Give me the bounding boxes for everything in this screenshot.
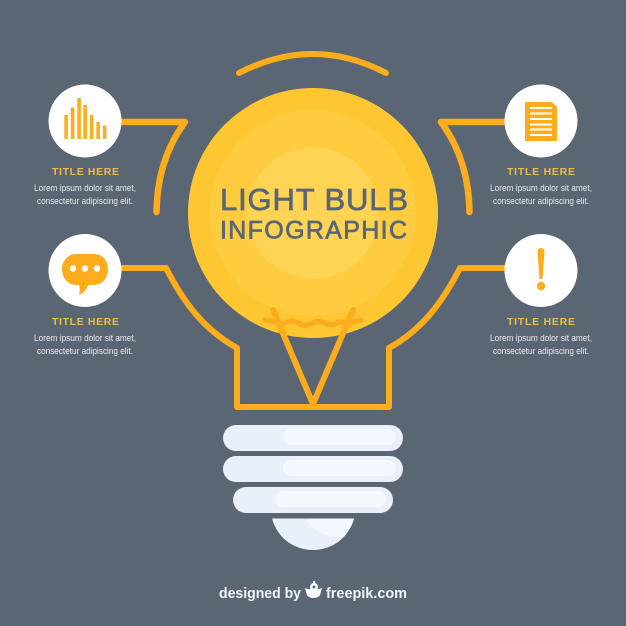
footer credit: designed by [219, 585, 302, 602]
title: TITLE HERE [507, 316, 575, 328]
filament coil [265, 320, 361, 325]
icon: freepik mascot [305, 581, 322, 598]
panel: top left [34, 84, 136, 206]
footer credit: freepik.com [326, 585, 407, 602]
panel: bottom left [34, 234, 136, 356]
bulb glass [188, 88, 438, 338]
body text: Lorem ipsum dolor sit amet, [490, 333, 592, 343]
body text [490, 333, 592, 356]
connector: top right [441, 122, 508, 212]
body text [490, 183, 592, 206]
base ring 3 [233, 487, 393, 513]
body text: consectetur adipiscing elit. [37, 196, 133, 206]
icon: bar chart [48, 84, 122, 158]
footer credit [219, 581, 407, 602]
bulb outline with lower connectors [118, 268, 508, 407]
body text: Lorem ipsum dolor sit amet, [490, 183, 592, 193]
icon: document [504, 84, 578, 158]
body text: consectetur adipiscing elit. [493, 346, 589, 356]
body text: Lorem ipsum dolor sit amet, [34, 333, 136, 343]
body text [34, 333, 136, 356]
heading: INFOGRAPHIC [220, 216, 407, 244]
base ring 1 [223, 425, 403, 451]
panel: bottom right [490, 234, 592, 356]
lamp base [223, 425, 403, 550]
heading: LIGHT BULB [220, 182, 408, 217]
heading [220, 182, 408, 244]
connector: top left [118, 122, 185, 212]
body text: consectetur adipiscing elit. [37, 346, 133, 356]
arc above bulb [239, 54, 386, 73]
base cap [272, 518, 354, 550]
body text: consectetur adipiscing elit. [493, 196, 589, 206]
title: TITLE HERE [52, 166, 119, 178]
base ring 2 [223, 456, 403, 482]
title: TITLE HERE [52, 316, 119, 328]
body text [34, 183, 136, 206]
panel: top right [490, 84, 592, 206]
title: TITLE HERE [507, 166, 575, 178]
body text: Lorem ipsum dolor sit amet, [34, 183, 136, 193]
icon: speech bubble [48, 234, 122, 307]
icon: exclamation mark [504, 234, 578, 307]
filament supports [273, 310, 353, 404]
